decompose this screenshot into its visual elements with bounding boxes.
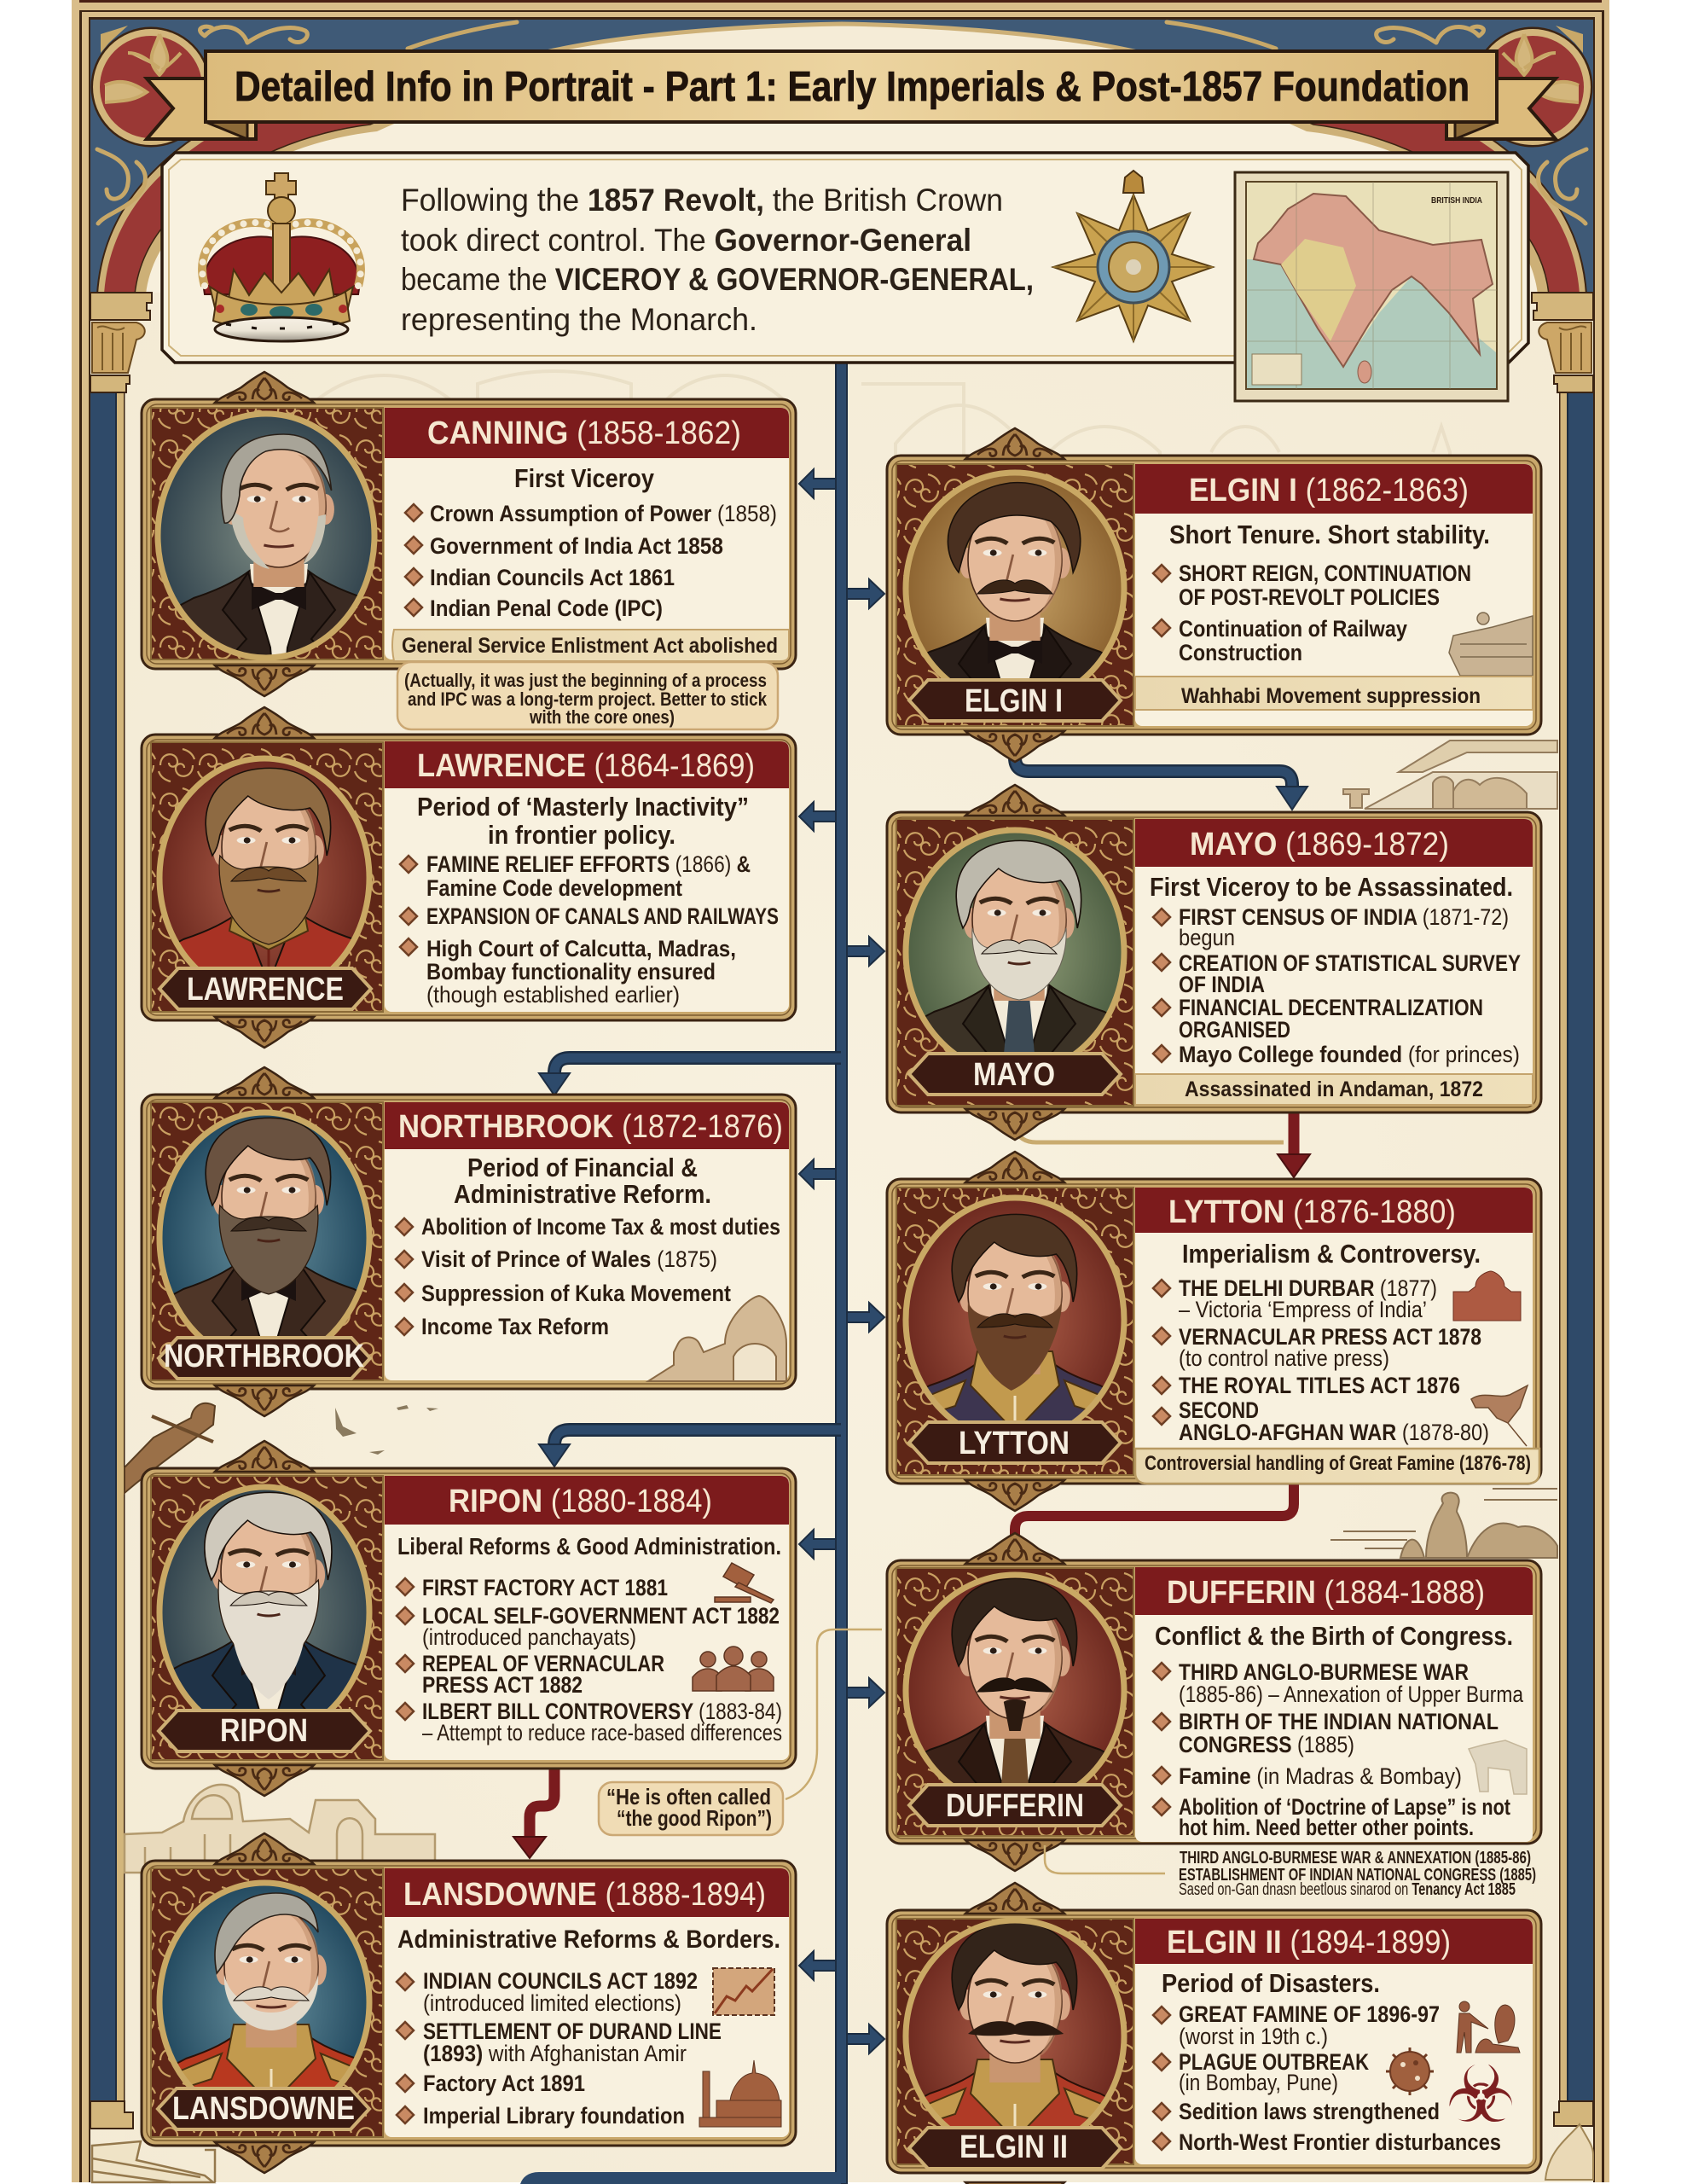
bullet list: THE ROYAL TITLES ACT 1876 — [1179, 1373, 1460, 1398]
callout: Canning note: (Actually, it was just the beginning of a process — [404, 670, 767, 691]
footer note — [392, 630, 789, 661]
bullet list: CONGRESS (1885) — [1179, 1732, 1354, 1757]
bullet list: Famine Code development — [426, 875, 682, 901]
bullet list — [1153, 1659, 1524, 1840]
bullet list: High Court of Calcutta, Madras, — [426, 936, 736, 961]
thin leader line — [1045, 1845, 1165, 1873]
bullet list: INDIAN COUNCILS ACT 1892 — [423, 1968, 698, 1994]
illustration: railway rock — [1449, 613, 1533, 676]
branch arrows from the spine — [799, 469, 884, 2053]
card: Lawrence — [140, 706, 797, 1049]
heading: Lawrence: LAWRENCE (1864-1869) — [417, 748, 755, 784]
left pillar — [90, 293, 152, 2129]
bullet list: Income Tax Reform — [421, 1314, 609, 1339]
name plate: MAYO — [973, 1057, 1055, 1093]
thin leader line — [786, 1629, 882, 1799]
red connector: Mayo to Lytton — [1015, 1112, 1310, 1177]
portrait: Dufferin — [902, 1571, 1128, 1783]
bullet list: Indian Penal Code (IPC) — [430, 595, 663, 621]
bullet list: OF POST-REVOLT POLICIES — [1179, 584, 1440, 610]
bullet list: FINANCIAL DECENTRALIZATION — [1179, 995, 1483, 1020]
icon: people — [693, 1647, 774, 1691]
callout: the good Ripon — [599, 1782, 783, 1835]
card: Elgin II — [878, 1883, 1541, 2184]
callout: Canning note — [397, 662, 778, 729]
bullet list: FIRST CENSUS OF INDIA (1871-72) — [1179, 904, 1509, 930]
icon: biohazard: ☣ — [1446, 2049, 1516, 2140]
bullet list: Abolition of ‘Doctrine of Lapse” is not — [1179, 1794, 1510, 1820]
sketch: bottom-right dome — [1545, 2124, 1593, 2180]
bullet list: Continuation of Railway — [1179, 616, 1407, 642]
bullet list: (introduced panchayats) — [422, 1624, 636, 1650]
right corner medallion — [1167, 22, 1591, 224]
footer note: Wahhabi Movement suppression — [1181, 684, 1481, 708]
intro text — [401, 183, 1034, 337]
tagline: Conflict & the Birth of Congress. — [1155, 1621, 1513, 1651]
tagline: Period of Disasters. — [1162, 1968, 1380, 1998]
intro text: became the VICEROY & GOVERNOR-GENERAL, — [401, 262, 1034, 297]
map of british india: BRITISH INDIA — [1431, 196, 1482, 206]
bullet list: – Victoria ‘Empress of India’ — [1179, 1297, 1427, 1322]
bullet list: SHORT REIGN, CONTINUATION — [1179, 561, 1471, 586]
portrait: Elgin I — [902, 469, 1128, 678]
name plate — [909, 1422, 1121, 1463]
Dufferin side notes: ESTABLISHMENT OF INDIAN NATIONAL CONGRESS (1885) — [1179, 1866, 1536, 1885]
tagline: First Viceroy — [514, 463, 655, 493]
heading: Canning: CANNING (1858-1862) — [427, 415, 741, 451]
heading: Elgin I: ELGIN I (1862-1863) — [1189, 473, 1469, 508]
bullet list: REPEAL OF VERNACULAR — [422, 1651, 664, 1676]
icon: famine figure — [1457, 2001, 1520, 2053]
sketch: colonial monuments near Elgin I — [1343, 741, 1557, 809]
sketch: famine figures near Lytton — [1330, 1489, 1557, 1558]
bullet list — [397, 1575, 782, 1745]
bullet list: Suppression of Kuka Movement — [421, 1281, 731, 1306]
blue connector: Lawrence to Northbrook — [539, 1058, 841, 1095]
card: Mayo — [883, 785, 1541, 1167]
bullet list: LOCAL SELF-GOVERNMENT ACT 1882 — [422, 1603, 780, 1629]
bullet list — [397, 1968, 722, 2129]
card: Northbrook — [132, 1067, 796, 1444]
intro panel — [162, 153, 1528, 401]
name plate — [909, 680, 1121, 721]
bullet list: Imperial Library foundation — [423, 2103, 685, 2129]
heading: Lansdowne: LANSDOWNE (1888-1894) — [403, 1877, 766, 1913]
footer note — [1135, 1449, 1539, 1484]
tagline: Period of ‘Masterly Inactivity” — [417, 792, 749, 822]
blue connector: Elgin I to Mayo — [1015, 742, 1307, 810]
bullet list: Indian Councils Act 1861 — [430, 565, 675, 590]
bullet list — [1153, 904, 1521, 1067]
bullet list: Government of India Act 1858 — [430, 533, 723, 559]
bullet list: THIRD ANGLO-BURMESE WAR — [1179, 1659, 1469, 1685]
bullet list: ORGANISED — [1179, 1017, 1290, 1043]
name plate: DUFFERIN — [946, 1788, 1084, 1824]
name plate: NORTHBROOK — [164, 1339, 364, 1374]
Dufferin side notes — [1179, 1849, 1536, 1899]
icon: chart — [713, 1968, 774, 2015]
portrait: Lansdowne — [157, 1880, 372, 2087]
intro text: representing the Monarch. — [401, 302, 757, 337]
card: Ripon — [132, 1441, 796, 1819]
bullet list: – Attempt to reduce race-based differences — [422, 1720, 782, 1745]
bullet list — [1153, 1275, 1489, 1445]
card: Lytton — [878, 1152, 1541, 1541]
left corner medallion — [92, 22, 517, 224]
bullet list: PLAGUE OUTBREAK — [1179, 2049, 1369, 2075]
title text: Detailed Info in Portrait - Part 1: Early Imperials & Post-1857 Foundation — [235, 64, 1470, 110]
bullet list: Crown Assumption of Power (1858) — [430, 501, 777, 526]
bullet list: (though established earlier) — [426, 982, 680, 1008]
bullet list: Mayo College founded (for princes) — [1179, 1042, 1520, 1067]
card: Elgin I — [885, 427, 1542, 763]
icon: star of india — [1053, 171, 1213, 341]
bullet list: hot him. Need better other points. — [1179, 1815, 1474, 1840]
intro text: Following the 1857 Revolt, the British Crown — [401, 183, 1003, 218]
tagline: Administrative Reforms & Borders. — [397, 1926, 780, 1954]
tagline: Period of Financial & — [467, 1153, 698, 1182]
bullet list: CREATION OF STATISTICAL SURVEY — [1179, 950, 1521, 976]
Dufferin side notes: Sased on-Gan dnasn beetlous sinarod on Tenancy Act 1885 — [1179, 1880, 1516, 1899]
callout: the good Ripon: “the good Ripon”) — [617, 1805, 772, 1831]
bullet list: (introduced limited elections) — [423, 1990, 681, 2016]
bullet list: THE DELHI DURBAR (1877) — [1179, 1275, 1437, 1301]
name plate — [909, 1785, 1121, 1826]
bullet list — [1153, 561, 1471, 665]
bullet list — [400, 851, 779, 1008]
red connector: Lytton to Dufferin — [1015, 1483, 1294, 1544]
bullet list: Sedition laws strengthened — [1179, 2099, 1440, 2124]
name plate: LAWRENCE — [187, 972, 344, 1008]
name plate — [909, 1054, 1121, 1095]
bullet list: Visit of Prince of Wales (1875) — [421, 1246, 717, 1272]
bullet list: Construction — [1179, 640, 1302, 665]
sketch: palace skyline — [125, 1785, 435, 1873]
portrait: Lawrence — [157, 756, 372, 967]
bullet list: Famine (in Madras & Bombay) — [1179, 1763, 1462, 1789]
footer note: Assassinated in Andaman, 1872 — [1185, 1077, 1483, 1101]
callout: Canning note: with the core ones) — [529, 706, 675, 728]
bullet list: VERNACULAR PRESS ACT 1878 — [1179, 1324, 1481, 1350]
bullet list: PRESS ACT 1882 — [422, 1672, 583, 1698]
blue connector: Northbrook to Ripon — [539, 1430, 841, 1467]
bullet list: GREAT FAMINE OF 1896-97 — [1179, 2001, 1440, 2027]
heading: Elgin II: ELGIN II (1894-1899) — [1167, 1925, 1451, 1960]
portrait: Elgin II — [902, 1918, 1128, 2126]
bullet list: Factory Act 1891 — [423, 2071, 585, 2096]
bullet list: North-West Frontier disturbances — [1179, 2129, 1501, 2155]
name plate — [159, 1711, 370, 1751]
heading: Lytton: LYTTON (1876-1880) — [1168, 1194, 1456, 1230]
tagline: Short Tenure. Short stability. — [1169, 520, 1490, 549]
icon: afghan eagle — [1471, 1385, 1528, 1446]
bullet list: begun — [1179, 925, 1235, 950]
name plate — [909, 2128, 1121, 2169]
portrait: Canning — [155, 411, 377, 660]
portrait: Ripon — [157, 1484, 372, 1709]
bullet list: (1893) with Afghanistan Amir — [423, 2041, 687, 2066]
tagline: in frontier policy. — [488, 820, 675, 850]
bullet list: SECOND — [1179, 1397, 1259, 1423]
icon: plague virus — [1386, 2048, 1434, 2095]
card: Canning — [140, 370, 797, 698]
Dufferin side notes: THIRD ANGLO-BURMESE WAR & ANNEXATION (1885-86) — [1180, 1849, 1531, 1867]
bullet list: Abolition of Income Tax & most duties — [421, 1214, 780, 1240]
card: Lansdowne — [135, 1833, 796, 2184]
footer note — [1135, 677, 1533, 710]
bullet list: FIRST FACTORY ACT 1881 — [422, 1575, 668, 1600]
portrait: Mayo — [902, 828, 1128, 1052]
card: Dufferin — [878, 1533, 1541, 1905]
tagline: First Viceroy to be Assassinated. — [1150, 872, 1513, 902]
callout: the good Ripon: “He is often called — [606, 1784, 771, 1809]
bullet list: (worst in 19th c.) — [1179, 2024, 1328, 2049]
sketch: bottom-left building — [92, 2141, 215, 2182]
tagline: Administrative Reform. — [454, 1179, 711, 1209]
icon: Delhi durbar palace — [1453, 1271, 1521, 1321]
blue connector: bottom exit — [525, 2178, 841, 2184]
map of british india — [1235, 172, 1508, 401]
tagline — [454, 1153, 711, 1209]
bullet list: EXPANSION OF CANALS AND RAILWAYS — [426, 903, 779, 929]
bullet list: ILBERT BILL CONTROVERSY (1883-84) — [422, 1699, 782, 1724]
heading: Northbrook: NORTHBROOK (1872-1876) — [398, 1109, 783, 1145]
portrait: Northbrook — [157, 1109, 372, 1336]
intro text: took direct control. The Governor-General — [401, 223, 971, 258]
sketch: bird on branch — [125, 1403, 215, 1493]
name plate: RIPON — [220, 1713, 308, 1749]
bullet list: BIRTH OF THE INDIAN NATIONAL — [1179, 1709, 1499, 1734]
faint famine sketch — [1469, 1740, 1527, 1794]
bullet list: SETTLEMENT OF DURAND LINE — [423, 2018, 722, 2044]
name plate: LANSDOWNE — [172, 2091, 355, 2127]
bullet list: ANGLO-AFGHAN WAR (1878-80) — [1179, 1420, 1489, 1445]
footer note: Controversial handling of Great Famine (1876-78) — [1145, 1452, 1531, 1475]
footer note — [1135, 1074, 1533, 1105]
name plate: LYTTON — [959, 1426, 1070, 1461]
heading: Ripon: RIPON (1880-1884) — [449, 1484, 712, 1519]
heading: Mayo: MAYO (1869-1872) — [1190, 827, 1449, 863]
portrait: Lytton — [902, 1194, 1128, 1420]
bullet list — [405, 501, 777, 621]
right pillar — [1532, 293, 1593, 2126]
bullet list: OF INDIA — [1179, 972, 1265, 997]
name plate: ELGIN I — [965, 683, 1063, 719]
bullet list — [396, 1214, 780, 1339]
icon: gavel — [715, 1563, 774, 1603]
bullet list — [1153, 2001, 1501, 2155]
illustration: domed gateway — [648, 1296, 786, 1381]
tagline: Liberal Reforms & Good Administration. — [397, 1533, 781, 1560]
icon: capitol building — [699, 2060, 781, 2127]
bullet list: (to control native press) — [1179, 1345, 1389, 1371]
faint architecture watermark — [316, 371, 1450, 512]
central timeline spine — [836, 363, 847, 2184]
footer note: General Service Enlistment Act abolished — [402, 634, 778, 658]
bullet list: (in Bombay, Pune) — [1179, 2070, 1338, 2095]
red connector: Ripon to Lansdowne — [513, 1769, 554, 1858]
icon: royal crown — [202, 173, 361, 341]
callout: Canning note: and IPC was a long-term project. Better to stick — [408, 688, 768, 710]
tagline — [417, 792, 749, 850]
heading: Dufferin: DUFFERIN (1884-1888) — [1167, 1575, 1485, 1611]
tagline: Imperialism & Controversy. — [1182, 1239, 1481, 1269]
bullet list: FAMINE RELIEF EFFORTS (1866) & — [426, 851, 751, 877]
bullet list: (1885-86) – Annexation of Upper Burma — [1179, 1682, 1524, 1707]
name plate: ELGIN II — [959, 2129, 1068, 2165]
bullet list: Bombay functionality ensured — [426, 959, 716, 985]
sketch: flying birds — [335, 1405, 438, 1455]
title banner — [147, 51, 1556, 139]
